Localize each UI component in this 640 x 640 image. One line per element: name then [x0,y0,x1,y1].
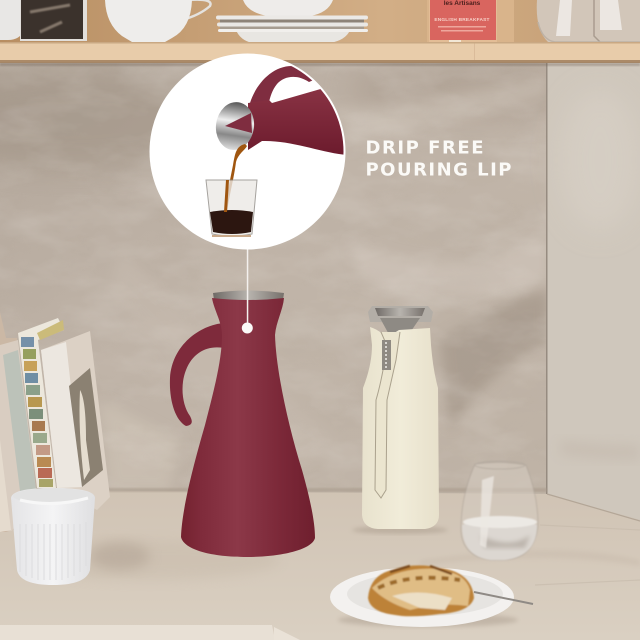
burgundy jug [170,290,315,557]
glass jars [537,0,640,42]
tea tin: les Artisans [444,0,481,7]
books group [0,312,110,532]
steel spout lip [213,100,257,152]
callout label [366,138,512,180]
callout connector line with dot [242,248,253,334]
pastry [368,565,474,616]
callout label: POURING LIP [366,160,512,180]
coffee stream [224,144,247,212]
left cup [0,0,25,40]
plate with pastry and fork [330,565,533,627]
framed picture [20,0,87,41]
tea tin: ENGLISH BREAKFAST [434,17,490,23]
plate shadow [338,613,518,627]
panel: wooden shelf with tableware [0,0,640,66]
white fluted mug [11,488,95,585]
panel: countertop [0,488,640,640]
body [181,298,315,557]
cream neoprene carafe [362,306,439,529]
tea tin [427,0,514,44]
panel: marble back wall [0,63,546,465]
callout circle: pouring lip detail [150,54,346,250]
handle [170,323,224,426]
book with stamp spine [18,318,64,488]
water glass [461,461,538,560]
callout label: DRIP FREE [366,138,484,158]
stacked plates and bowl [216,0,368,43]
steel rim [213,290,284,300]
white fluted cup [105,0,211,42]
panel: right marble wall [546,60,640,520]
poured jug [248,66,346,155]
cream art book [41,331,110,510]
shot glass [206,180,257,236]
carafe shadow [352,526,448,534]
shelf front board [0,42,640,66]
